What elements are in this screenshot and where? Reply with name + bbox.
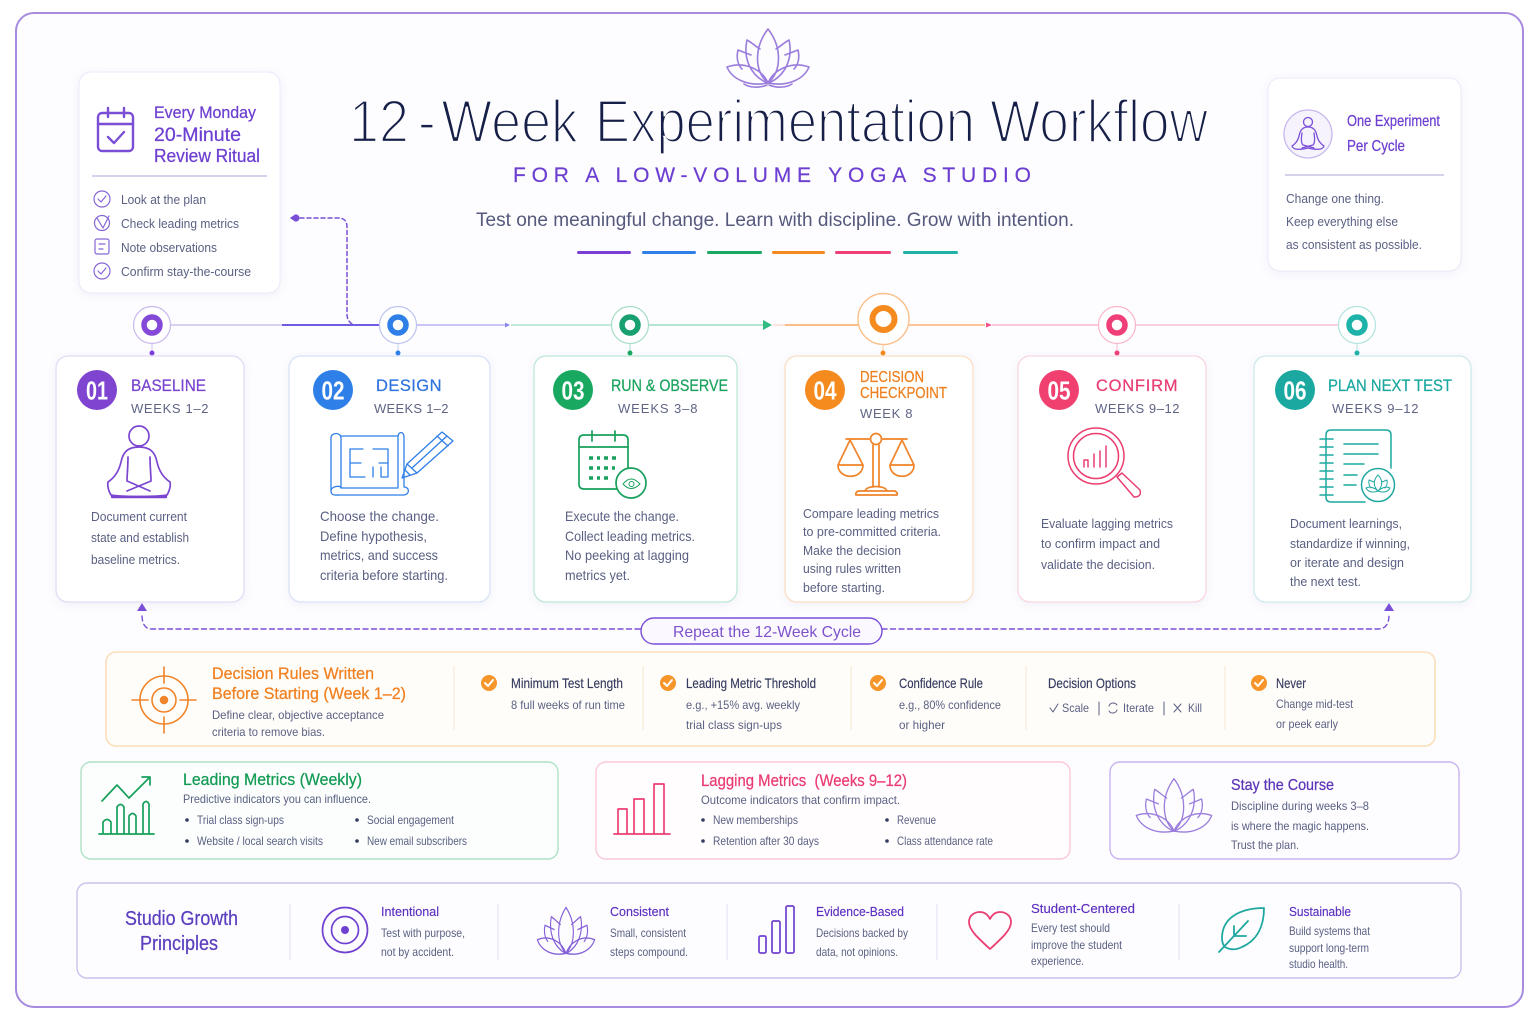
panel: one experiment per cycle [1268, 78, 1461, 271]
principle: student-centered: improve the student [1031, 938, 1123, 952]
node 6 [1338, 306, 1376, 344]
principle: sustainable [1219, 904, 1371, 971]
principles heading [125, 908, 238, 955]
repeat pill: Repeat the 12-Week Cycle [673, 624, 861, 641]
rule: leading metric threshold [660, 675, 816, 732]
description 4: to pre-committed criteria. [803, 524, 941, 539]
icon: meditating figure [108, 426, 170, 497]
principle: evidence-based [759, 904, 908, 959]
rule: confidence: or higher [899, 718, 945, 732]
icon: notebook with lotus [1320, 430, 1394, 502]
rule: never: or peek early [1276, 717, 1338, 731]
description 2 [320, 508, 448, 583]
rule: never: Never [1276, 675, 1306, 691]
description 1: Document current [91, 509, 187, 524]
description 2: Choose the change. [320, 508, 439, 524]
description 3: Collect leading metrics. [565, 528, 695, 544]
decision rules text: criteria to remove bias. [212, 725, 325, 739]
icon: rising chart [99, 777, 154, 834]
description 3: Execute the change. [565, 508, 679, 524]
description 3: metrics yet. [565, 567, 630, 583]
number badge 02: 02 [322, 376, 344, 406]
weeks 5: WEEKS 9–12 [1095, 401, 1181, 416]
rule: minimum test length: 8 full weeks of run time [511, 698, 625, 712]
description 6: or iterate and design [1290, 555, 1404, 570]
principle: consistent: Small, consistent [610, 926, 687, 940]
number badge 01 [77, 370, 117, 410]
description 3 [565, 508, 695, 583]
rule: confidence: Confidence Rule [899, 675, 983, 691]
rule: leading metric threshold: trial class sign-ups [686, 718, 782, 732]
ritual checklist: Look at the plan [121, 192, 206, 207]
week 4: WEEK 8 [860, 406, 914, 421]
description 2: metrics, and success [320, 547, 438, 563]
principle: consistent: steps compound. [610, 945, 688, 959]
stay text [1231, 799, 1369, 852]
experiment text: as consistent as possible. [1286, 237, 1422, 252]
step 3: run and observe [534, 306, 737, 602]
principle: evidence-based: data, not opinions. [816, 945, 898, 959]
principle: sustainable: Build systems that [1289, 924, 1371, 938]
panel: weekly review ritual [79, 72, 280, 293]
card 5 [1018, 356, 1206, 602]
decision rules heading: Decision Rules Written [212, 664, 374, 683]
leading list: Website / local search visits [197, 834, 323, 848]
rule: confidence: e.g., 80% confidence [899, 698, 1001, 712]
lagging heading: Lagging Metrics (Weeks 9–12) [701, 771, 907, 790]
ritual heading: Every Monday [154, 103, 256, 122]
weeks 1: WEEKS 1–2 [131, 401, 210, 416]
number badge 05: 05 [1048, 376, 1070, 406]
description 2: criteria before starting. [320, 567, 448, 583]
panel: leading metrics [81, 762, 558, 859]
description 4: Compare leading metrics [803, 506, 939, 521]
decision rules heading [212, 664, 406, 703]
rule: leading metric threshold: e.g., +15% avg. weekly [686, 698, 800, 712]
icon: lotus emblem [727, 29, 809, 87]
icon: balance scale [838, 434, 914, 495]
icon: target [132, 667, 196, 733]
lagging list: Retention after 30 days [713, 834, 819, 848]
heading 5: CONFIRM [1096, 377, 1179, 395]
icon: magnifier with bars [1068, 428, 1140, 497]
principle: sustainable: studio health. [1289, 957, 1348, 971]
stay text: is where the magic happens. [1231, 819, 1369, 833]
rule: decision options [1048, 675, 1202, 715]
experiment text [1286, 191, 1422, 252]
number badge 03 [553, 370, 593, 410]
description 1 [91, 509, 189, 567]
node 1 [134, 306, 170, 344]
node 5 [1098, 306, 1136, 344]
title [349, 88, 1209, 155]
number badge 02 [313, 370, 353, 410]
description 6: standardize if winning, [1290, 536, 1410, 551]
step 2: design [289, 306, 490, 602]
experiment heading: Per Cycle [1347, 138, 1405, 155]
icon: meditating figure badge [1284, 110, 1332, 158]
rule: decision options: Kill [1188, 701, 1202, 715]
experiment heading [1347, 113, 1440, 155]
step 4: decision checkpoint [785, 294, 973, 602]
stay text: Discipline during weeks 3–8 [1231, 799, 1369, 813]
node 3 [612, 306, 648, 344]
panel: decision rules [106, 652, 1435, 746]
principle: intentional: not by accident. [381, 945, 454, 959]
icon: blueprint and pencil [331, 432, 453, 495]
ritual checklist: Note observations [121, 240, 217, 255]
panel: lagging metrics [596, 762, 1070, 859]
connector: ritual to design [291, 214, 354, 325]
repeat cycle loop [137, 603, 1394, 644]
leading list: New email subscribers [367, 834, 467, 848]
heading 4: CHECKPOINT [860, 385, 947, 402]
heading 2: DESIGN [376, 377, 443, 395]
card 3 [534, 356, 737, 602]
ritual checklist [94, 191, 251, 279]
heading 3: RUN & OBSERVE [611, 377, 728, 395]
description 5: Evaluate lagging metrics [1041, 516, 1173, 531]
rule: decision options: Iterate [1123, 701, 1154, 715]
number badge 06: 06 [1284, 376, 1306, 406]
description 5 [1041, 516, 1173, 572]
lagging list: New memberships [713, 813, 798, 827]
ritual checklist: Confirm stay-the-course [121, 264, 251, 279]
card 2 [289, 356, 490, 602]
decision rules heading: Before Starting (Week 1–2) [212, 684, 406, 703]
principle: intentional: Intentional [381, 904, 439, 919]
node 4 [858, 294, 909, 344]
colour key bars [577, 251, 958, 254]
principle: sustainable: Sustainable [1289, 904, 1351, 919]
card 1 [56, 356, 244, 602]
leading heading: Leading Metrics (Weekly) [183, 770, 362, 789]
lagging text: Outcome indicators that confirm impact. [701, 793, 900, 807]
rule: never: Change mid-test [1276, 697, 1354, 711]
weeks 2: WEEKS 1–2 [374, 401, 450, 416]
principle: intentional [322, 904, 465, 959]
principle: student-centered [969, 901, 1135, 968]
principle: evidence-based: Evidence-Based [816, 904, 904, 919]
description 4 [803, 506, 941, 595]
card 6 [1254, 356, 1471, 602]
step 5: confirm [1018, 306, 1206, 602]
principle: student-centered: experience. [1031, 954, 1084, 968]
description 4: before starting. [803, 580, 885, 595]
principles heading: Studio Growth [125, 908, 238, 930]
rule: decision options: Scale [1062, 701, 1089, 715]
experiment text: Change one thing. [1286, 191, 1384, 206]
leading list: Social engagement [367, 813, 455, 827]
principle: sustainable: support long-term [1289, 941, 1369, 955]
rule: leading metric threshold: Leading Metric Threshold [686, 675, 816, 691]
tagline: Test one meaningful change. Learn with discipline. Grow with intention. [476, 210, 1074, 231]
heading 1: BASELINE [131, 377, 206, 395]
timeline lines [170, 320, 1338, 330]
icon: calendar with eye [579, 431, 646, 498]
principle: consistent [537, 904, 688, 959]
principle: student-centered: Student-Centered [1031, 901, 1135, 916]
rule: decision options: Decision Options [1048, 675, 1136, 691]
number badge 03: 03 [562, 376, 584, 406]
number badge 04: 04 [814, 376, 837, 406]
heading 4 [860, 369, 947, 402]
principle: consistent: Consistent [610, 904, 669, 919]
number badge 06 [1275, 370, 1315, 410]
repeat pill [641, 618, 882, 644]
number badge 04 [805, 370, 845, 410]
title: Experimentation [595, 88, 975, 155]
description 6: Document learnings, [1290, 516, 1402, 531]
step 6: plan next test [1254, 306, 1471, 602]
description 3: No peeking at lagging [565, 547, 689, 563]
decision rules text: Define clear, objective acceptance [212, 708, 384, 722]
description 6 [1290, 516, 1410, 589]
number badge 05 [1039, 370, 1079, 410]
ritual checklist: Check leading metrics [121, 216, 239, 231]
description 6: the next test. [1290, 574, 1361, 589]
icon: lotus [1136, 779, 1212, 832]
rule: minimum test length [481, 675, 625, 712]
description 1: baseline metrics. [91, 552, 180, 567]
icon: calendar check [98, 108, 133, 151]
description 2: Define hypothesis, [320, 528, 427, 544]
weeks 6: WEEKS 9–12 [1332, 401, 1420, 416]
ritual heading: 20-Minute [154, 125, 241, 146]
lagging list [701, 813, 993, 848]
heading 6: PLAN NEXT TEST [1328, 377, 1452, 395]
description 4: Make the decision [803, 543, 901, 558]
panel: stay the course [1110, 762, 1459, 859]
leading list: Trial class sign-ups [197, 813, 284, 827]
lagging list: Revenue [897, 813, 936, 827]
description 4: using rules written [803, 561, 901, 576]
decision rules text [212, 708, 384, 739]
node 2 [380, 306, 416, 344]
heading 4: DECISION [860, 369, 924, 386]
ritual heading [154, 103, 260, 166]
step 1: baseline [56, 306, 244, 602]
title: Workflow [990, 88, 1209, 155]
rule: confidence [870, 675, 1001, 732]
principles heading: Principles [140, 933, 218, 955]
number badge 01: 01 [86, 376, 108, 406]
description 1: state and establish [91, 530, 189, 545]
panel: studio growth principles [77, 883, 1461, 978]
title: 12-Week [349, 88, 579, 155]
leading text: Predictive indicators you can influence. [183, 792, 371, 806]
icon: bar chart [614, 784, 670, 834]
principle: evidence-based: Decisions backed by [816, 926, 908, 940]
rule: never [1251, 675, 1354, 731]
experiment heading: One Experiment [1347, 113, 1440, 130]
rule: minimum test length: Minimum Test Length [511, 675, 623, 691]
principle: intentional: Test with purpose, [381, 926, 465, 940]
description 5: validate the decision. [1041, 557, 1155, 572]
description 5: to confirm impact and [1041, 536, 1160, 551]
stay heading: Stay the Course [1231, 777, 1334, 794]
subtitle: FOR A LOW-VOLUME YOGA STUDIO [513, 164, 1037, 187]
lagging list: Class attendance rate [897, 834, 993, 848]
leading list [185, 813, 467, 848]
card 4 [785, 356, 973, 602]
experiment text: Keep everything else [1286, 214, 1398, 229]
ritual heading: Review Ritual [154, 146, 260, 166]
weeks 3: WEEKS 3–8 [618, 401, 699, 416]
principle: student-centered: Every test should [1031, 921, 1110, 935]
stay text: Trust the plan. [1231, 838, 1299, 852]
